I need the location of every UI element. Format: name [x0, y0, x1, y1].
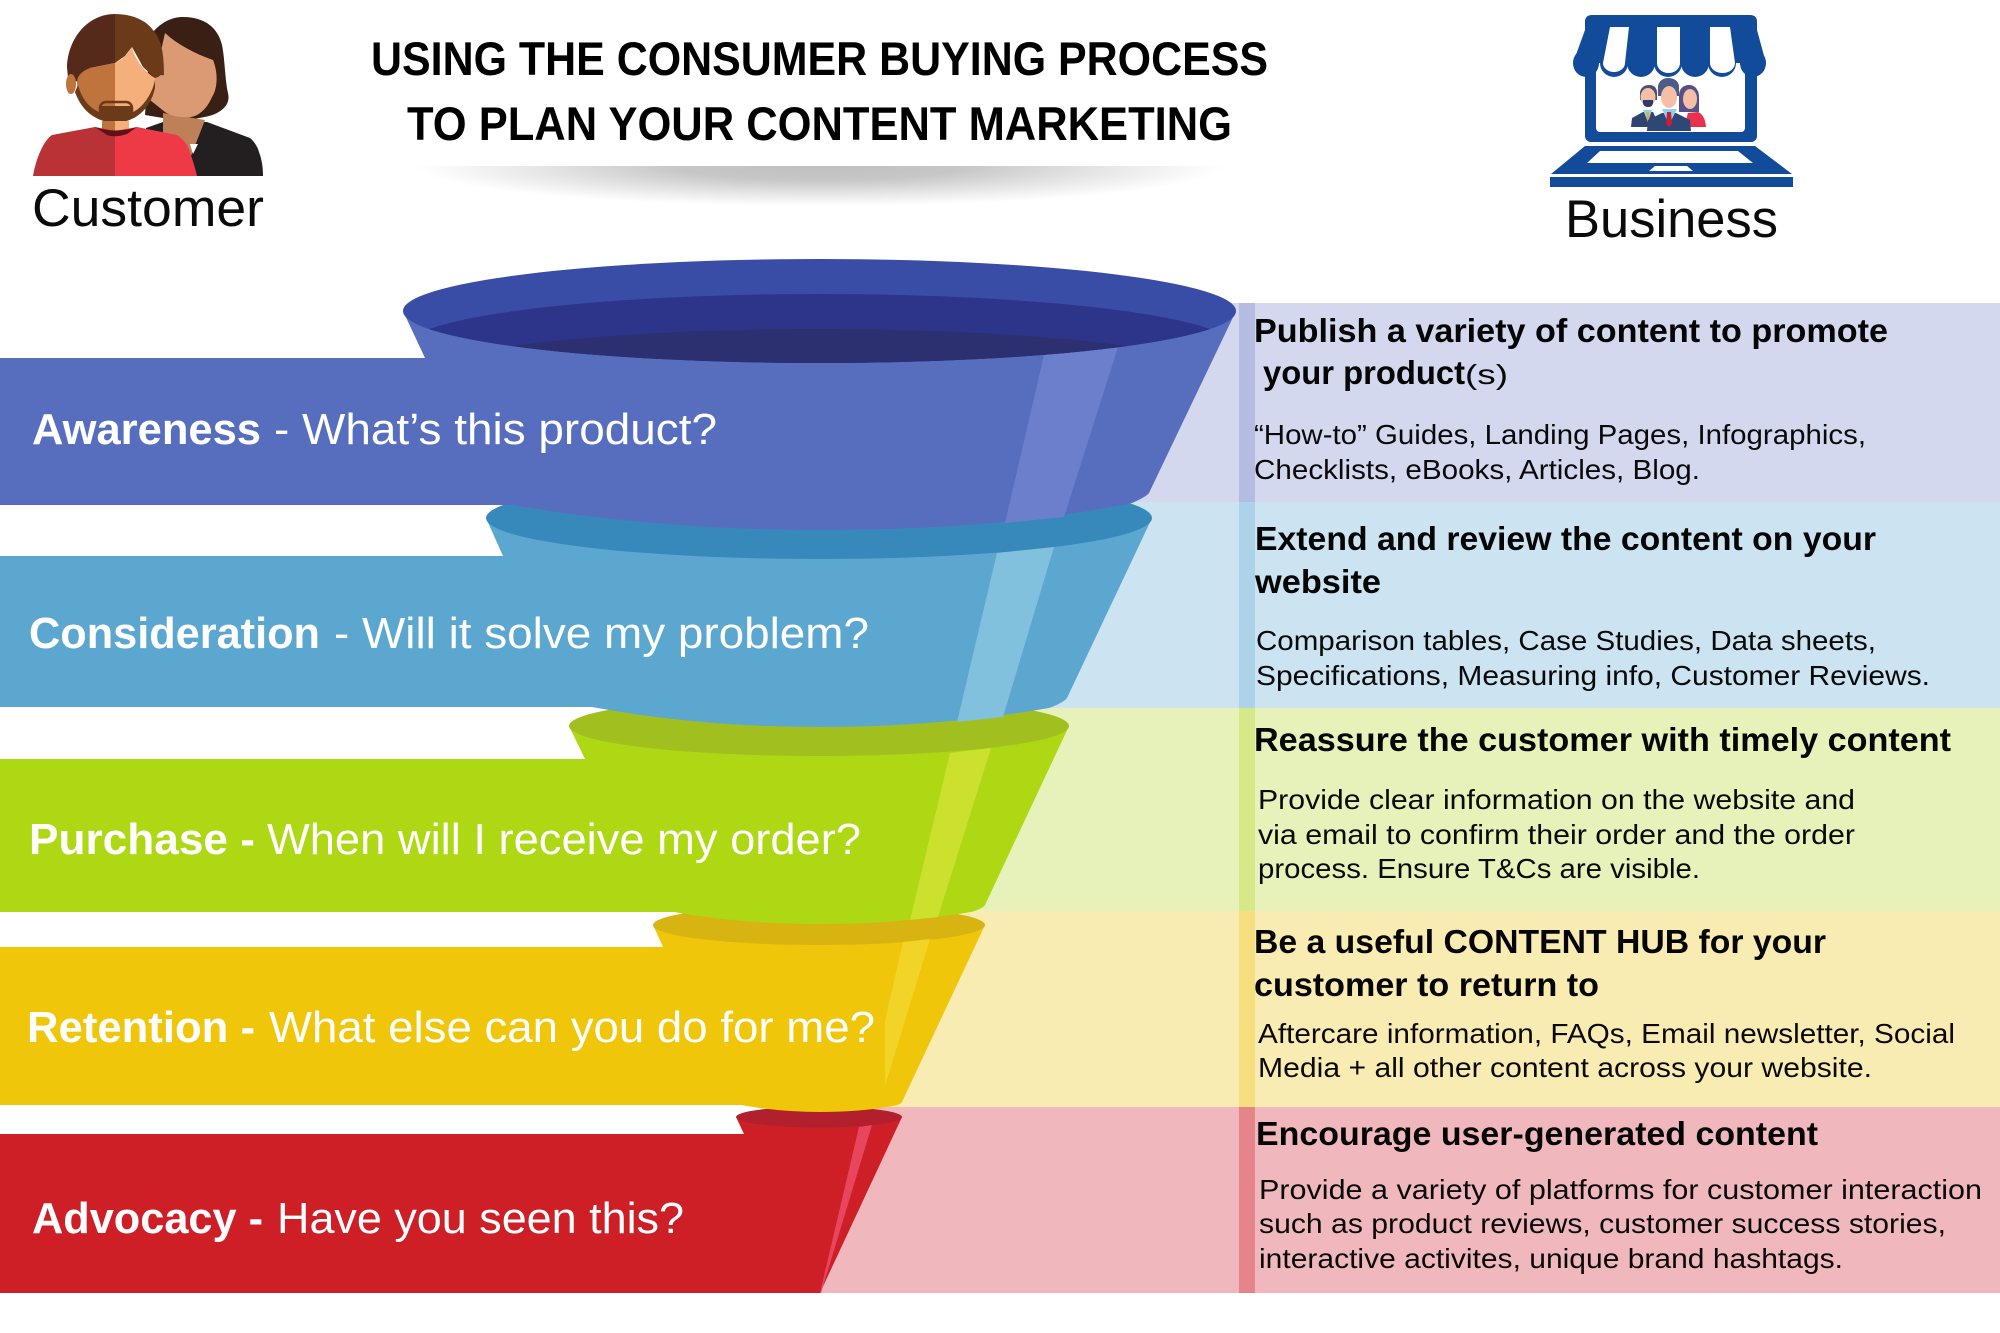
icon: business shop on laptop: [1550, 15, 1793, 187]
title: TO PLAN YOUR CONTENT MARKETING: [407, 97, 1232, 150]
business label: Business: [1565, 190, 1778, 249]
panel: awareness content: “How-to” Guides, Landing Pages, Infographics,: [1254, 419, 1866, 450]
panel: consideration content: [1049, 502, 2000, 708]
label: awareness: - What’s this product?: [274, 405, 717, 454]
panel: advocacy content: such as product reviews, customer success stories,: [1259, 1208, 1946, 1239]
label: purchase: [29, 815, 861, 864]
panel: consideration content: Specifications, Measuring info, Customer Reviews.: [1256, 660, 1930, 691]
label: consideration: - Will it solve my problem?: [334, 609, 869, 658]
label: advocacy: Advocacy -: [32, 1194, 263, 1243]
panel: purchase content: Provide clear information on the website and: [1258, 784, 1855, 815]
icon: people in shop: [1631, 78, 1706, 131]
panel: purchase content: process. Ensure T&Cs are visible.: [1258, 853, 1700, 884]
panel: consideration content: Comparison tables, Case Studies, Data sheets,: [1256, 625, 1876, 656]
panel: retention content: [880, 911, 2000, 1107]
label: awareness: Awareness: [32, 405, 261, 454]
panel: purchase content: [971, 708, 2000, 911]
label: retention: Retention -: [27, 1003, 255, 1052]
panel: retention content: Aftercare information, FAQs, Email newsletter, Social: [1258, 1018, 1955, 1049]
panel: retention content: customer to return to: [1254, 966, 1599, 1003]
funnel stage: retention: [0, 905, 985, 1112]
panel: retention content: Media + all other content across your website.: [1258, 1052, 1872, 1083]
label: retention: What else can you do for me?: [269, 1003, 875, 1052]
man: [33, 14, 197, 176]
label: consideration: Consideration: [29, 609, 320, 658]
customer label: Customer: [32, 179, 264, 238]
panel: advocacy content: Provide a variety of platforms for customer interaction: [1259, 1174, 1982, 1205]
panel: retention content: Be a useful CONTENT HUB for your: [1254, 923, 1826, 960]
funnel stage: consideration: [0, 477, 1152, 727]
panel: advocacy content: [820, 1107, 2000, 1293]
panel: awareness content: Publish a variety of content to promote: [1254, 312, 1888, 349]
funnel stage: purchase: [0, 696, 1069, 924]
panel: awareness content: (s): [1465, 359, 1508, 390]
label: purchase: Purchase -: [29, 815, 255, 864]
panel: advocacy content: Encourage user-generated content: [1256, 1115, 1818, 1152]
label: advocacy: Have you seen this?: [277, 1194, 684, 1243]
title shadow: [415, 166, 1225, 206]
panel: awareness content: [1120, 303, 2000, 502]
label: retention: [27, 1003, 875, 1052]
panel: purchase content: via email to confirm their order and the order: [1258, 819, 1855, 850]
panel: purchase content: Reassure the customer with timely content: [1254, 721, 1951, 758]
label: consideration: [29, 609, 869, 658]
panel: awareness content: your product: [1263, 354, 1465, 391]
woman: [145, 17, 263, 176]
title: [371, 32, 1268, 150]
panel: awareness content: Checklists, eBooks, Articles, Blog.: [1254, 454, 1700, 485]
label: advocacy: [32, 1194, 684, 1243]
panel: consideration content: Extend and review the content on your: [1255, 520, 1876, 557]
funnel stage: advocacy: [0, 1106, 902, 1293]
funnel stage: awareness: [0, 259, 1236, 530]
title: USING THE CONSUMER BUYING PROCESS: [371, 32, 1268, 85]
label: awareness: [32, 405, 717, 454]
label: purchase: When will I receive my order?: [267, 815, 861, 864]
panel: consideration content: website: [1254, 563, 1381, 600]
icon: customer: [33, 14, 263, 176]
panel: advocacy content: interactive activites, unique brand hashtags.: [1259, 1243, 1843, 1274]
